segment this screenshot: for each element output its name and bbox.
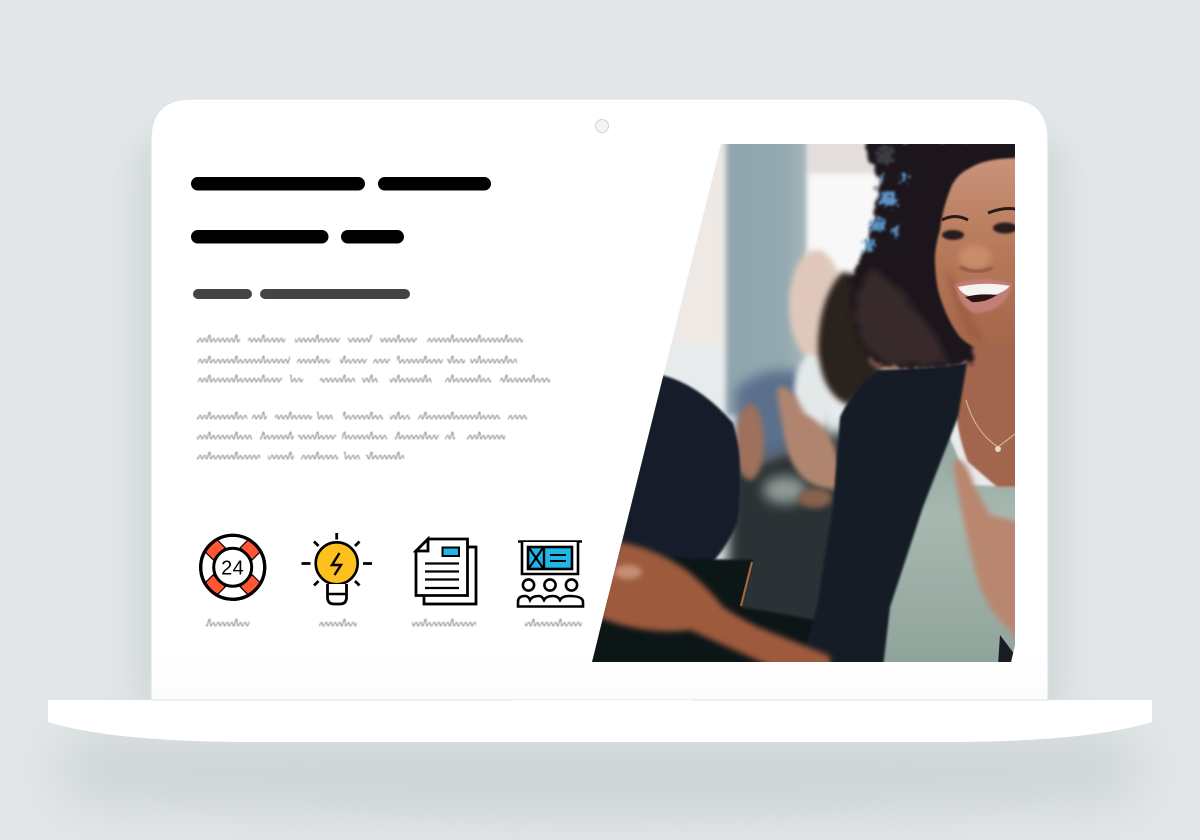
- blurred clapping hands: [736, 387, 847, 508]
- dark foreground: [592, 558, 814, 662]
- foreground hand and forearm: [600, 542, 830, 668]
- icon: light bulb: [302, 533, 372, 604]
- mouth: [955, 279, 1012, 313]
- icon labels: [206, 617, 582, 629]
- icon: lifebuoy 24: 24: [221, 558, 244, 580]
- hair: [850, 140, 1020, 369]
- text block: first paragraph: [197, 333, 550, 385]
- photo backdrop: [664, 144, 995, 560]
- laptop base: [48, 700, 1152, 742]
- phone edge: [741, 562, 752, 606]
- laptop screen body: [151, 99, 1048, 700]
- icon: presentation audience: [518, 542, 583, 606]
- icon: documents: [416, 539, 476, 604]
- icon: lifebuoy 24: [201, 535, 265, 599]
- jacket: [800, 363, 967, 668]
- foreground man's shoulder: [592, 375, 740, 640]
- text block: second paragraph: [197, 410, 527, 462]
- blurred background people: [725, 250, 914, 650]
- right hand: [953, 460, 1020, 645]
- eyebrows: [942, 208, 1016, 220]
- webcam: [596, 120, 608, 132]
- eyes: [942, 230, 964, 240]
- subheading placeholder bars: [193, 289, 410, 299]
- heading: title placeholder bars: [191, 177, 491, 244]
- neck and chest: [955, 340, 1020, 487]
- laptop shadow: [60, 130, 1140, 818]
- necklace: [966, 400, 1015, 447]
- photo: smiling woman in a meeting: [590, 135, 1020, 668]
- face: [935, 158, 1020, 348]
- blouse: [882, 436, 1015, 662]
- nose: [959, 245, 991, 269]
